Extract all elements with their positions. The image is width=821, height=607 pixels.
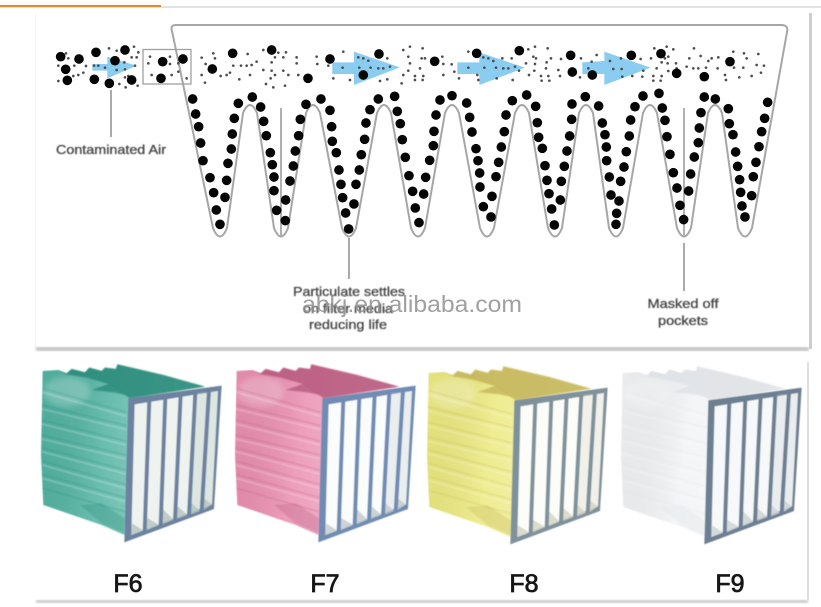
large particles, right half — [419, 46, 772, 230]
panel: filter grades — [36, 358, 809, 603]
pocket filter outline — [172, 25, 787, 236]
label: particulate settles: Particulate settles — [293, 284, 406, 299]
label: particulate settles: reducing life — [309, 317, 387, 332]
filter F6 — [41, 364, 222, 542]
filter F9 — [621, 366, 802, 544]
small particles, left half — [57, 45, 426, 89]
label: F7: F7 — [310, 570, 340, 598]
filter F8 — [427, 366, 608, 544]
masked-off pocket lines — [281, 108, 684, 236]
leader line: masked pockets — [683, 243, 685, 291]
small particles, right half — [441, 45, 765, 82]
label: masked off pockets — [648, 296, 719, 328]
leader line: contaminated air — [110, 90, 112, 137]
label: F9: F9 — [715, 570, 745, 598]
label: particulate settles: on filter media — [303, 301, 394, 316]
label: masked off pockets: pockets — [658, 313, 709, 328]
large particles, left half — [56, 45, 424, 234]
label: masked off pockets: Masked off — [648, 296, 719, 311]
sample box — [143, 50, 191, 84]
label: F6: F6 — [113, 570, 143, 598]
label: contaminated air: Contaminated Air — [56, 142, 167, 157]
airflow arrows — [92, 52, 651, 85]
label: F8: F8 — [509, 570, 539, 598]
top bar — [0, 5, 821, 8]
filter F7 — [235, 364, 416, 542]
watermark: abkj.en.alibaba.com — [302, 291, 522, 317]
panel: airflow diagram — [35, 13, 812, 351]
leader line: particulate — [348, 238, 350, 279]
label: particulate settles — [293, 284, 406, 332]
